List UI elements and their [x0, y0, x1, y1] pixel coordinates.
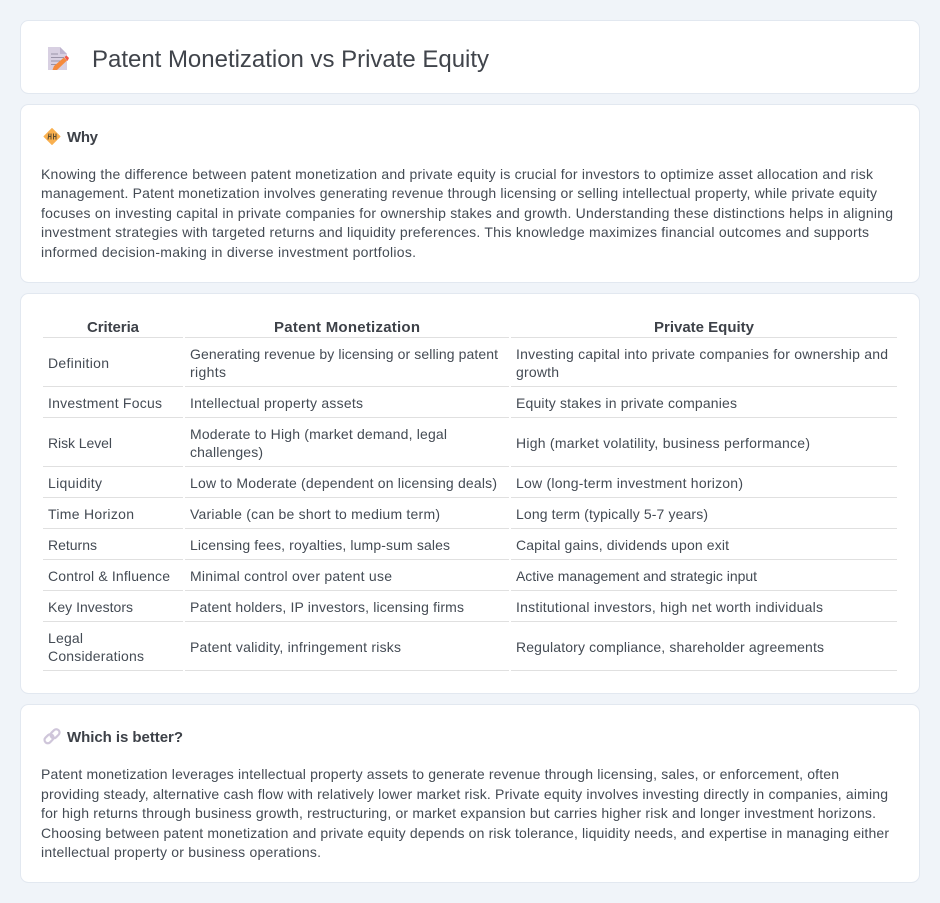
row: legal considerations: Legal [48, 630, 83, 646]
text block: which is better: Choosing between patent monetization and private equity depends on risk tolerance, liquidity needs, and expertise in managing either [41, 825, 889, 841]
row: returns [48, 537, 729, 553]
row: risk level: Risk Level [48, 435, 112, 451]
row: liquidity [48, 475, 743, 491]
row: definition: growth [516, 364, 559, 380]
text block: why: investment strategies with targeted returns and liquidity preferences. This knowledge maximizes financial outcomes and supports [41, 224, 869, 240]
text block: which is better: intellectual property or business operations. [41, 844, 321, 860]
row: definition: Investing capital into private companies for ownership and [516, 346, 888, 362]
row: legal considerations: Patent validity, infringement risks [190, 639, 401, 655]
row: investment focus [48, 395, 737, 411]
icon: link [43, 728, 61, 745]
panel: why [20, 104, 920, 282]
table header: Patent Monetization [274, 319, 420, 336]
row: key investors: Institutional investors, high net worth individuals [516, 599, 823, 615]
text block: why: informed decision-making in diverse investment portfolios. [41, 244, 416, 260]
row: time horizon: Long term (typically 5-7 years) [516, 506, 708, 522]
row: control and influence: Active management and strategic input [516, 568, 757, 584]
row: risk level: High (market volatility, business performance) [516, 435, 810, 451]
row: key investors: Patent holders, IP investors, licensing firms [190, 599, 464, 615]
text block: why: Knowing the difference between patent monetization and private equity is crucial for investors to optimize asset allocation and risk [41, 166, 874, 182]
row: time horizon: Variable (can be short to medium term) [190, 506, 440, 522]
row: returns: Licensing fees, royalties, lump-sum sales [190, 537, 450, 553]
row: legal considerations: Regulatory compliance, shareholder agreements [516, 639, 824, 655]
heading: which is better: Which is better? [67, 729, 183, 746]
row: definition: Definition [48, 355, 109, 371]
row: returns: Returns [48, 537, 97, 553]
row: liquidity: Liquidity [48, 475, 102, 491]
row: control and influence: Minimal control over patent use [190, 568, 392, 584]
text block: why: focuses on investing capital in private companies for ownership stakes and growth. Understanding these distinctions helps in aligning [41, 205, 893, 221]
row: liquidity: Low (long-term investment horizon) [516, 475, 743, 491]
text block: which is better [41, 766, 889, 860]
row: returns: Capital gains, dividends upon exit [516, 537, 729, 553]
text block: which is better: for high returns through business growth, restructuring, or market expansion but carries higher risk and longer investment horizons. [41, 805, 876, 821]
row: key investors [48, 599, 823, 615]
row: time horizon [48, 506, 708, 522]
row: control and influence: Control & Influence [48, 568, 170, 584]
heading: why: Why [67, 129, 99, 146]
panel: which is better [20, 704, 920, 882]
row: risk level: Moderate to High (market demand, legal [190, 426, 447, 442]
row: time horizon: Time Horizon [48, 506, 134, 522]
panel: header [20, 20, 920, 94]
row: definition: rights [190, 364, 226, 380]
text block: why: management. Patent monetization involves generating revenue through licensing or selling intellectual property, while private equity [41, 185, 877, 201]
row: risk level [48, 426, 810, 460]
row: definition [48, 346, 888, 380]
text block: which is better: providing steady, alternative cash flow with relatively lower market risk. Private equity involves investing directly in companies, aiming [41, 786, 888, 802]
text block: why [41, 166, 893, 260]
row: legal considerations [48, 630, 824, 664]
table header: Criteria [87, 319, 140, 336]
table header [87, 319, 755, 336]
row: risk level: challenges) [190, 444, 263, 460]
icon: diamond sign [44, 128, 60, 144]
row: control and influence [48, 568, 757, 584]
row: investment focus: Intellectual property assets [190, 395, 363, 411]
text block: which is better: Patent monetization leverages intellectual property assets to generate revenue through licensing, sales, or enforcement, often [41, 766, 839, 782]
row: definition: Generating revenue by licensing or selling patent [190, 346, 498, 362]
title: Patent Monetization vs Private Equity [92, 46, 489, 73]
icon: memo with pencil [48, 47, 69, 70]
row: investment focus: Equity stakes in private companies [516, 395, 737, 411]
row: legal considerations: Considerations [48, 648, 144, 664]
panel: comparison table [20, 294, 920, 694]
row: investment focus: Investment Focus [48, 395, 162, 411]
row: liquidity: Low to Moderate (dependent on licensing deals) [190, 475, 497, 491]
row: key investors: Key Investors [48, 599, 133, 615]
table header: Private Equity [654, 319, 755, 336]
